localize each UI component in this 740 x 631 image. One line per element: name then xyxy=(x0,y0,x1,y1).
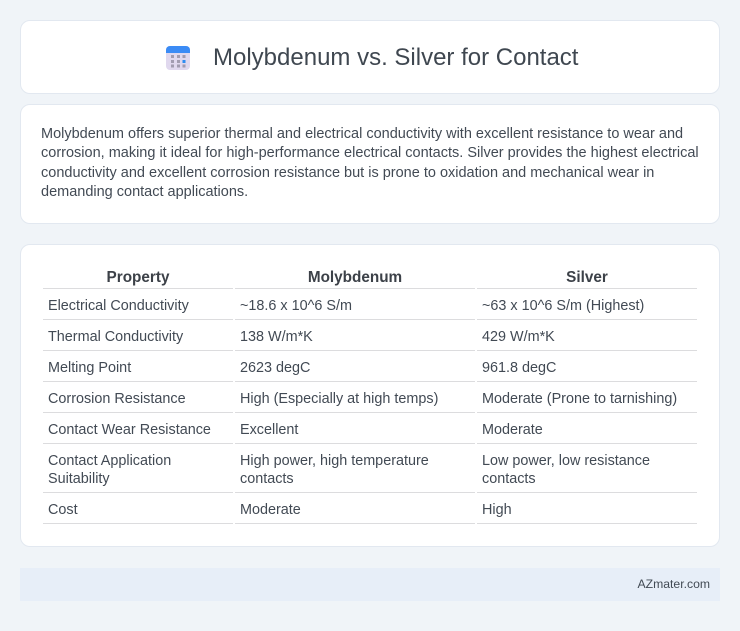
summary text: corrosion, making it ideal for high-performance electrical contacts. Silver provides the highest electrical xyxy=(41,145,699,161)
comparison table: Thermal Conductivity xyxy=(48,329,183,345)
comparison table: contacts xyxy=(240,471,294,487)
comparison table: Contact Wear Resistance xyxy=(48,422,211,438)
comparison table: Silver xyxy=(566,269,608,286)
comparison table xyxy=(43,269,697,524)
comparison table: Excellent xyxy=(240,422,298,438)
comparison table: Cost xyxy=(48,502,78,518)
comparison table: 429 W/m*K xyxy=(482,329,555,345)
comparison table: High (Especially at high temps) xyxy=(240,391,438,407)
comparison table: High power, high temperature xyxy=(240,453,429,469)
footer source label: AZmater.com xyxy=(638,577,710,591)
comparison table: Molybdenum xyxy=(308,269,402,286)
summary text xyxy=(41,126,699,200)
comparison table: 961.8 degC xyxy=(482,360,556,376)
icon: calendar xyxy=(166,46,190,70)
comparison table: Electrical Conductivity xyxy=(48,298,189,314)
comparison table: contacts xyxy=(482,471,536,487)
comparison table: Low power, low resistance xyxy=(482,453,650,469)
comparison table: Suitability xyxy=(48,471,110,487)
table card xyxy=(20,244,720,547)
title card xyxy=(20,20,720,94)
footer bar xyxy=(20,568,720,601)
comparison table: Moderate (Prone to tarnishing) xyxy=(482,391,677,407)
comparison table: 2623 degC xyxy=(240,360,310,376)
comparison table: Property xyxy=(107,269,169,286)
summary text: demanding contact applications. xyxy=(41,184,248,200)
comparison table: Corrosion Resistance xyxy=(48,391,186,407)
comparison table: Melting Point xyxy=(48,360,131,376)
comparison table: Contact Application xyxy=(48,453,171,469)
comparison table: ~63 x 10^6 S/m (Highest) xyxy=(482,298,644,314)
comparison table: Moderate xyxy=(482,422,543,438)
summary text: Molybdenum offers superior thermal and electrical conductivity with excellent resistance to wear and xyxy=(41,126,683,142)
comparison table: Moderate xyxy=(240,502,301,518)
title: Molybdenum vs. Silver for Contact xyxy=(213,44,578,71)
summary text: conductivity and excellent corrosion resistance but is prone to oxidation and mechanical wear in xyxy=(41,165,654,181)
summary card xyxy=(20,104,720,224)
comparison table: 138 W/m*K xyxy=(240,329,313,345)
comparison table: ~18.6 x 10^6 S/m xyxy=(240,298,352,314)
comparison table: High xyxy=(482,502,512,518)
